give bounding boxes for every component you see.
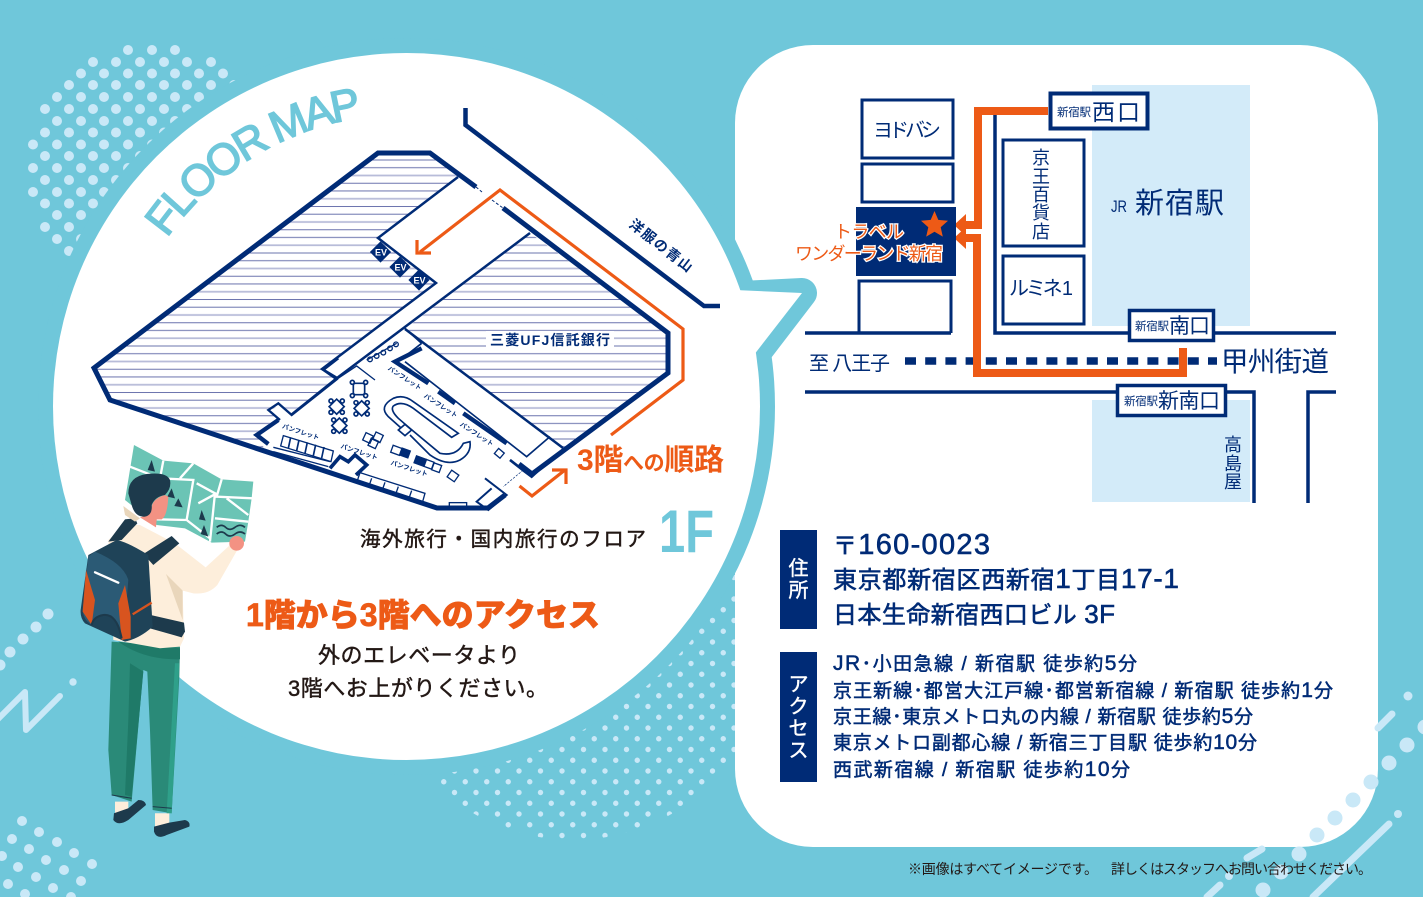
address block: 〒160-0023 — [833, 529, 990, 561]
traveller torso — [108, 518, 244, 648]
lobby details — [257, 328, 550, 510]
station exit: west: 新宿駅 — [1057, 105, 1092, 119]
building labels: 店 — [1032, 222, 1050, 242]
pamphlet labels: パンフレット — [390, 459, 429, 478]
floor label: 海外旅行・国内旅行のフロア — [360, 528, 646, 551]
access block: JR･小田急線 / 新宿駅 徒歩約5分 — [833, 652, 1137, 675]
building labels: 屋 — [1224, 472, 1242, 492]
access note: 3階へお上がりください。 — [288, 676, 548, 701]
floor label: 1F — [659, 498, 714, 565]
traveller legs — [108, 642, 190, 837]
illustration: traveller with map — [81, 445, 253, 837]
building labels: 甲州街道 — [1221, 346, 1329, 377]
station exit: west: 西口 — [1092, 99, 1140, 125]
access block: 京王新線･都営大江戸線･都営新宿線 / 新宿駅 徒歩約1分 — [833, 679, 1333, 702]
floor label — [360, 498, 714, 565]
station exit: new south — [1118, 386, 1226, 416]
backpack — [81, 540, 153, 642]
address block — [780, 529, 1179, 629]
dot pattern: bottom centre — [373, 440, 773, 840]
access block: 東京メトロ副都心線 / 新宿三丁目駅 徒歩約10分 — [833, 731, 1257, 754]
dot pattern: top left — [33, 50, 234, 251]
station exit: south: 南口 — [1169, 315, 1210, 338]
access block: ア — [788, 674, 808, 696]
location map — [795, 85, 1336, 503]
access heading: 1階から3階へのアクセス — [246, 597, 600, 633]
pamphlet labels: パンフレット — [281, 422, 320, 442]
station exit: south: 新宿駅 — [1135, 319, 1170, 333]
pamphlet labels: パンフレット — [386, 364, 423, 392]
building labels: 高 — [1224, 435, 1242, 455]
building labels: 貨 — [1032, 203, 1050, 223]
decorative dots and lines: lower right — [1207, 692, 1423, 897]
access panel background — [735, 45, 1378, 847]
address block: 住 — [788, 557, 808, 580]
pamphlet labels: パンフレット — [422, 392, 459, 420]
building labels: 新宿駅 — [1135, 187, 1224, 220]
access block: ス — [788, 740, 808, 762]
elevators: EV — [413, 276, 426, 286]
store block: ワンダーランド新宿 — [795, 244, 943, 264]
building labels: 王 — [1032, 167, 1050, 187]
building labels: 至 八王子 — [809, 353, 890, 375]
orange routes — [954, 111, 1183, 373]
building labels: 島 — [1224, 454, 1242, 474]
access block: セ — [788, 718, 808, 740]
station exit: new south: 新南口 — [1158, 390, 1220, 413]
elevators — [370, 241, 430, 291]
store block: トラベル — [834, 222, 904, 242]
address block: 東京都新宿区西新宿1丁目17-1 — [833, 563, 1179, 594]
access note — [288, 643, 548, 701]
building labels — [809, 120, 1329, 492]
access note: 外のエレベータより — [318, 643, 520, 668]
roads and buildings — [805, 100, 1336, 503]
access block — [780, 652, 1333, 782]
footnote: 詳しくはスタッフへお問い合わせください。 — [1111, 861, 1372, 877]
elevators: EV — [394, 262, 407, 272]
store block — [795, 207, 956, 276]
hatched tenant areas — [94, 153, 458, 448]
neighbour label: 洋服の青山: 洋服の青山 — [626, 216, 696, 275]
building labels: ヨドバシ — [873, 120, 941, 142]
route to 3F — [417, 190, 683, 496]
pamphlet labels — [281, 364, 495, 478]
station blocks — [1092, 85, 1250, 326]
speech bubble — [53, 53, 802, 760]
address block: 所 — [788, 579, 808, 602]
pamphlet labels: パンフレット — [458, 420, 495, 448]
building labels: 百 — [1032, 185, 1050, 205]
access block: 西武新宿線 / 新宿駅 徒歩約10分 — [833, 758, 1130, 781]
Koshu Kaido dashed line — [905, 357, 1217, 365]
station exit: new south: 新宿駅 — [1124, 394, 1158, 408]
route label: 3階への順路 — [577, 444, 724, 477]
floor plan — [94, 108, 720, 510]
map — [125, 445, 253, 543]
heading: FLOOR MAP: FLOOR MAP — [144, 88, 357, 236]
traveller head — [123, 473, 170, 527]
building labels: JR — [1111, 197, 1127, 216]
station exit: south — [1130, 310, 1214, 340]
building labels: 京 — [1032, 148, 1050, 168]
address block: 日本生命新宿西口ビル 3F — [833, 599, 1115, 629]
access block: ク — [788, 695, 808, 718]
building walls — [94, 108, 720, 508]
station exit: west — [1050, 94, 1148, 128]
footnote: ※画像はすべてイメージです。 — [908, 861, 1098, 877]
decorative dots and zigzag: lower left — [0, 608, 97, 897]
pamphlet labels: パンフレット — [340, 442, 379, 462]
elevators: EV — [375, 248, 387, 258]
tenant label: 三菱UFJ信託銀行: 三菱UFJ信託銀行 — [490, 332, 610, 348]
building labels: ルミネ 1 — [1009, 278, 1073, 300]
footnote — [908, 861, 1372, 877]
access block: 京王線･東京メトロ丸の内線 / 新宿駅 徒歩約5分 — [833, 705, 1253, 728]
